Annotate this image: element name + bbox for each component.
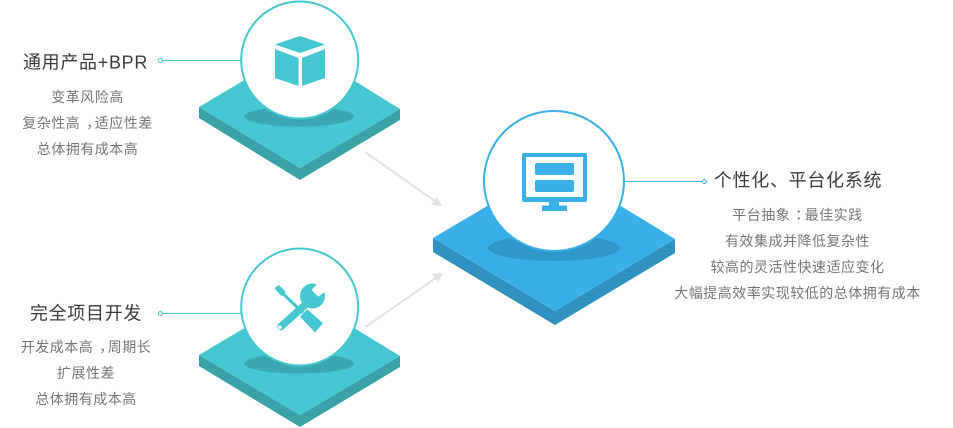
panel: personalised platform system bbox=[433, 111, 921, 325]
text block: platform benefits: 大幅提高效率实现较低的总体拥有成本 bbox=[674, 285, 921, 301]
text block: platform benefits: 最佳实践 bbox=[805, 207, 863, 223]
icon: cube bbox=[275, 36, 325, 86]
text block: platform benefits: 平台抽象 bbox=[732, 207, 790, 223]
heading: generic product: 通用产品+BPR bbox=[23, 52, 148, 72]
text block: custom development drawbacks: 总体拥有成本高 bbox=[35, 391, 137, 407]
text block: custom development drawbacks: 扩展性差 bbox=[57, 365, 115, 381]
platform: teal top bbox=[199, 47, 400, 180]
heading: personalised platform: 个性化、平台化系统 bbox=[714, 170, 882, 190]
text block: custom development drawbacks: 开发成本高 ，周期长 bbox=[21, 339, 151, 355]
text block: generic product drawbacks: 复杂性高 ，适应性差 bbox=[22, 115, 153, 131]
arrow: top platform to centre platform bbox=[365, 152, 442, 206]
text block: platform benefits: 较高的灵活性快速适应变化 bbox=[710, 259, 884, 275]
leader line: centre bbox=[625, 180, 706, 184]
icon: wrench and screwdriver bbox=[275, 282, 326, 332]
heading: custom development: 完全项目开发 bbox=[30, 304, 142, 324]
platform: teal bottom bbox=[199, 295, 400, 427]
panel: custom development bbox=[21, 248, 400, 427]
icon: monitor bbox=[522, 153, 587, 211]
text block: platform benefits: 有效集成并降低复杂性 bbox=[725, 233, 870, 249]
text block: generic product drawbacks bbox=[22, 89, 153, 157]
arrow: bottom platform to centre platform bbox=[366, 273, 443, 327]
panel: generic product and BPR bbox=[22, 2, 400, 180]
circle badge: top bbox=[241, 2, 358, 118]
leader line: top bbox=[158, 58, 241, 62]
text block: generic product drawbacks: 总体拥有成本高 bbox=[37, 141, 138, 157]
circle badge: bottom bbox=[241, 248, 358, 366]
platform: blue centre bbox=[433, 166, 675, 325]
text block: platform benefits bbox=[674, 206, 921, 301]
text block: generic product drawbacks: 变革风险高 bbox=[51, 89, 124, 105]
circle badge: centre bbox=[484, 111, 624, 251]
text block: custom development drawbacks bbox=[21, 339, 151, 407]
text block: platform benefits: ： bbox=[795, 206, 810, 222]
leader line: bottom bbox=[158, 312, 241, 316]
